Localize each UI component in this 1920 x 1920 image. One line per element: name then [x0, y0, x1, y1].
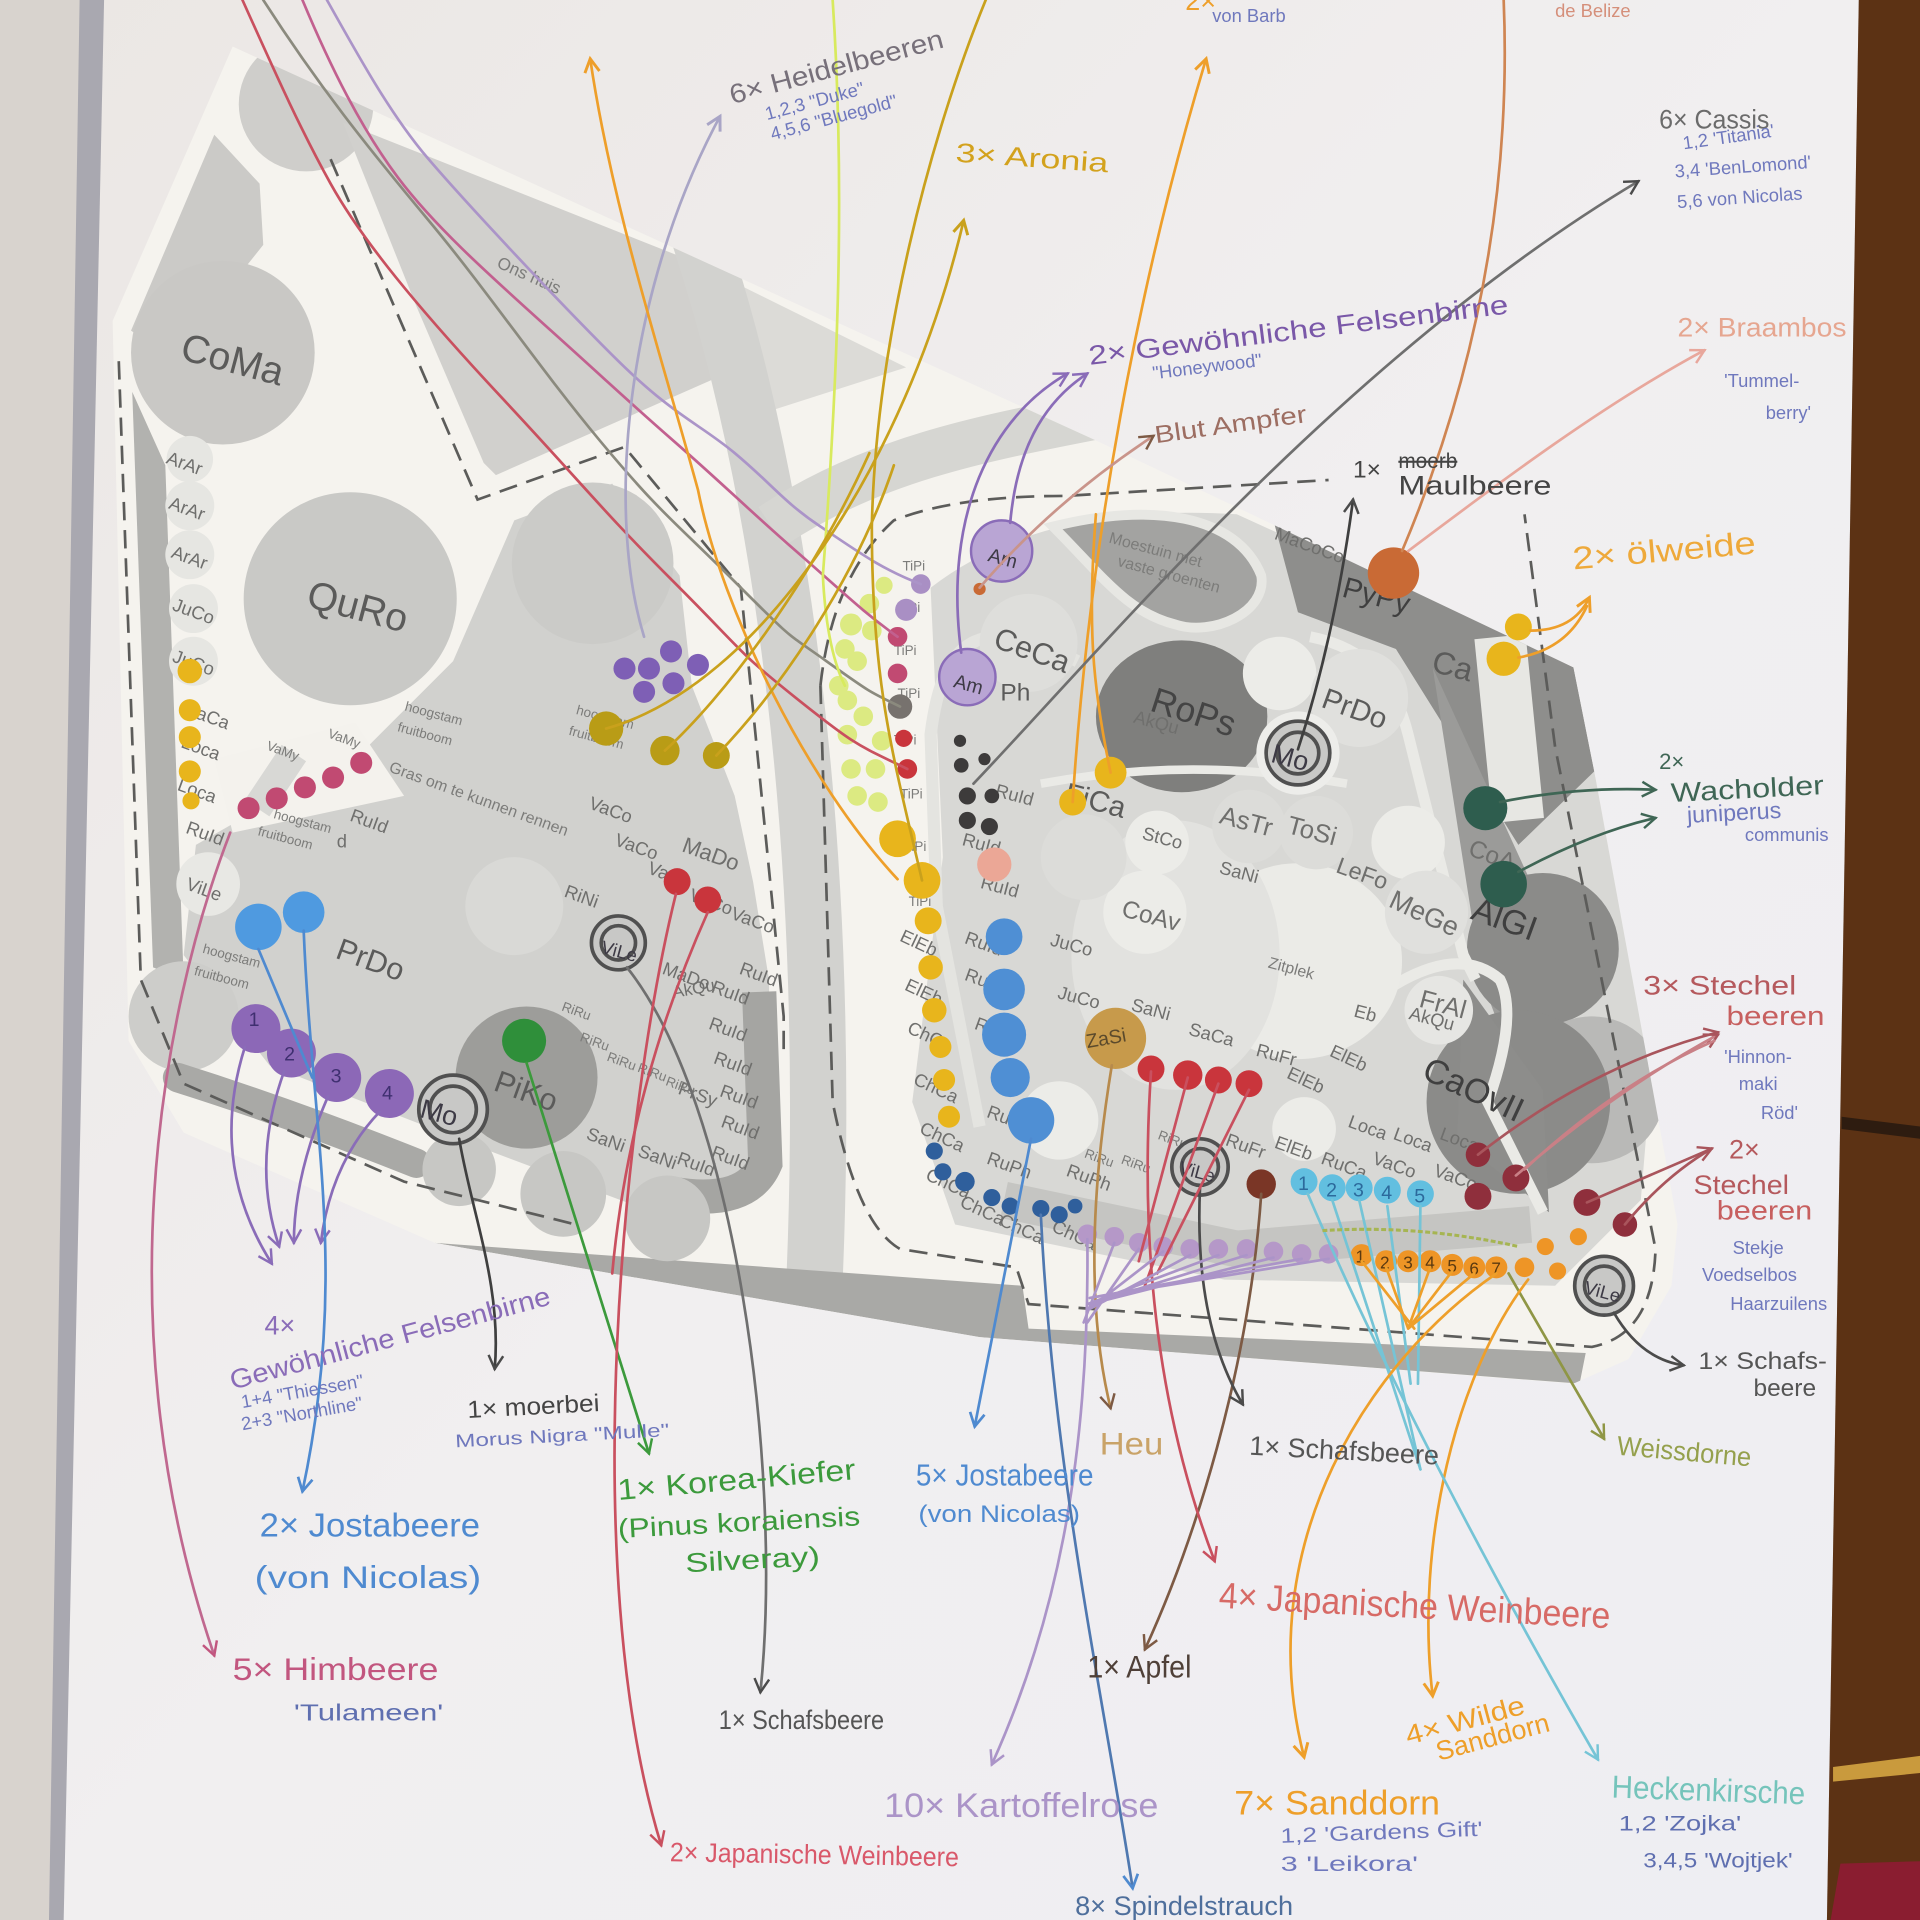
- markers: rose row: [1078, 1224, 1338, 1264]
- label: Stachelbeeren 2x: Stechel: [1693, 1170, 1789, 1200]
- marker labels printed over the dots: [249, 544, 1623, 1306]
- curves: bottom middle: [975, 1065, 1598, 1888]
- label: Heidelbeeren: 1,2,3 "Duke": [763, 77, 866, 124]
- plan labels: RuId: [709, 976, 752, 1009]
- label: Schafsbeere right: 1× Schafs-: [1698, 1348, 1827, 1375]
- plan labels: fruitboom: [256, 824, 314, 853]
- plan labels: QuRo: [303, 573, 413, 641]
- label: Maulbeere: moerb: [1398, 450, 1457, 473]
- plan labels: SaNi: [584, 1123, 629, 1156]
- plan labels: MaDo: [660, 957, 713, 994]
- plan labels: TiPi: [902, 559, 925, 574]
- label: Cassis: 6× Cassis: [1659, 105, 1769, 135]
- label: Jostabeere middle: [916, 1458, 1093, 1528]
- plan labels: RiRu: [1156, 1127, 1189, 1152]
- plan labels: RuId: [979, 871, 1021, 902]
- plan labels: PrDo: [1318, 682, 1392, 736]
- label: top right partial: [1185, 0, 1631, 26]
- plan labels: RuId: [706, 1013, 750, 1046]
- plan labels: SaNi: [635, 1140, 680, 1173]
- label: Heckenkirsche: 3,4,5 'Wojtjek': [1643, 1849, 1793, 1872]
- plan labels: PrSy: [676, 1077, 721, 1111]
- label: Braambos: [1678, 313, 1847, 423]
- plan labels: fruitboom: [193, 963, 251, 992]
- plan labels: TiPi: [909, 894, 931, 909]
- plan labels: CeCa: [989, 621, 1076, 680]
- plan labels: RiRu: [664, 1074, 697, 1098]
- markers: purple Felsenbirne: [231, 1004, 414, 1118]
- label: Blut Ampfer: Blut Ampfer: [1153, 401, 1308, 449]
- markers: navy Spindelstrauch: [926, 1142, 1082, 1223]
- plan labels: AkQu: [1407, 1002, 1457, 1035]
- markers: gold Aronia: [589, 711, 730, 769]
- plan labels: VaCo: [1431, 1160, 1480, 1195]
- label: Braambos: 'Tummel-: [1724, 370, 1799, 391]
- label: Schafsbeere right: [1698, 1348, 1827, 1402]
- markers: Heckenkirsche teal: [1291, 1168, 1434, 1207]
- marker labels printed over the dots: Mo: [1268, 738, 1312, 777]
- label: Felsenbirne bottom: 4×: [264, 1311, 295, 1341]
- plan labels: TiPi: [894, 732, 917, 747]
- label: Wacholder: Wacholder: [1670, 770, 1825, 808]
- markers: Wacholder: [1463, 786, 1527, 907]
- plan labels: RuFr: [1254, 1039, 1299, 1070]
- plan labels: RiRu: [636, 1060, 669, 1084]
- dashed boundary lines: [119, 159, 1656, 1347]
- plan labels: FiCa: [1061, 777, 1130, 825]
- label: Stachelbeeren 2x: 2×: [1729, 1134, 1760, 1164]
- label: Jostabeere left: (von Nicolas): [255, 1559, 481, 1595]
- label: Stachelbeeren 3x: beeren: [1727, 1001, 1824, 1031]
- plan labels: RuPh: [984, 1101, 1035, 1136]
- plan labels: ViLe: [184, 873, 225, 905]
- marker labels printed over the dots: 1: [1356, 1246, 1365, 1266]
- plan labels: ChCa: [911, 1068, 963, 1107]
- label: Kartoffelrose: 10× Kartoffelrose: [884, 1787, 1158, 1825]
- markers: raspberry row: [238, 627, 907, 819]
- marker labels printed over the dots: 1: [1298, 1173, 1309, 1195]
- marker labels printed over the dots: 4: [1381, 1182, 1392, 1204]
- label: Wilde Sanddorn: 4× Wilde: [1402, 1690, 1528, 1751]
- plan labels: SaCa: [1187, 1018, 1237, 1051]
- plan labels: RiRu: [560, 999, 593, 1023]
- label: Wilde Sanddorn: [1402, 1690, 1553, 1767]
- label: Jostabeere left: 2× Jostabeere: [260, 1508, 480, 1545]
- markers: red: [664, 730, 1262, 1097]
- label: Wacholder: communis: [1745, 824, 1829, 845]
- label: Jostabeere middle: 5× Jostabeere: [916, 1458, 1093, 1492]
- label: Schafsbeere bottom: 1× Schafsbeere: [719, 1705, 884, 1735]
- label: Himbeere: 'Tulameen': [294, 1699, 443, 1725]
- label: Moerbei: Morus Nigra "Mulle": [455, 1419, 670, 1451]
- plan labels: SaNi: [1217, 857, 1261, 887]
- plan labels: Loca: [1391, 1123, 1436, 1156]
- plan labels: RuFr: [1223, 1129, 1269, 1163]
- label: Schafsbeere right: beere: [1753, 1375, 1816, 1402]
- label: Stachelbeeren 2x: Voedselbos: [1702, 1264, 1797, 1285]
- label: Korea-Kiefer: Silveray): [684, 1541, 821, 1578]
- plan: house and roads: [239, 37, 1586, 1384]
- label: Stachelbeeren 3x: Röd': [1761, 1102, 1798, 1123]
- plan labels: ElEb: [902, 974, 946, 1009]
- plan labels: VaCo: [728, 902, 777, 937]
- plan labels: TiPi: [898, 600, 920, 615]
- label: Moerbei: [455, 1390, 670, 1451]
- markers: purple and grey TiPi: [888, 574, 931, 719]
- plan labels: ChCa: [1049, 1215, 1101, 1254]
- label: Heidelbeeren: 4,5,6 "Bluegold": [768, 90, 899, 144]
- plan labels: MaCoCo: [1272, 523, 1347, 567]
- label: Felsenbirne bottom: 1+4 "Thiessen": [239, 1370, 365, 1412]
- plan labels: ElEb: [897, 925, 941, 960]
- plan labels: RiRu: [1083, 1146, 1116, 1170]
- plan labels: fruitboom: [396, 719, 454, 748]
- marker labels printed over the dots: ViLe: [599, 936, 640, 966]
- plan labels: TiPi: [900, 786, 923, 801]
- label: Moerbei: 1× moerbei: [467, 1390, 600, 1424]
- marker labels printed over the dots: 4: [382, 1083, 393, 1105]
- plan labels: VaCo: [687, 884, 736, 919]
- label: Jostabeere middle: (von Nicolas): [918, 1501, 1080, 1528]
- label: Braambos: berry': [1766, 402, 1811, 423]
- plan labels: TiPi: [904, 839, 926, 854]
- marker labels printed over the dots: ViLe: [1582, 1277, 1623, 1306]
- plan labels: JuCo: [170, 645, 218, 680]
- plan labels: ChCa: [923, 1164, 975, 1203]
- label: Japanische Weinbeere centre: 4× Japanische Weinbeere: [1218, 1575, 1611, 1636]
- label: Sanddorn: 3 'Leikora': [1281, 1853, 1418, 1876]
- label: Heu: Heu: [1100, 1426, 1163, 1462]
- label: Sanddorn: 7× Sanddorn: [1234, 1785, 1440, 1823]
- markers: dark Mo and ViLe spirals: [419, 721, 1633, 1315]
- plan labels: PiKo: [490, 1064, 562, 1118]
- label: Felsenbirne top: [1087, 290, 1512, 391]
- markers: Zasi, Apfel, Maulbeere: [973, 547, 1419, 1199]
- marker labels printed over the dots: 6: [1469, 1259, 1479, 1279]
- label: Felsenbirne top: "Honeywood": [1151, 349, 1263, 383]
- coloured plant markers: [178, 520, 1637, 1315]
- marker labels printed over the dots: 3: [331, 1065, 342, 1087]
- plan labels: CoA: [1465, 835, 1519, 877]
- plan labels: ElEb: [1284, 1062, 1328, 1098]
- plan labels: RuId: [960, 828, 1003, 859]
- curves: top lines running off page: [242, 0, 921, 769]
- plan labels: TiPi: [898, 686, 920, 701]
- marker labels printed over the dots: 5: [1414, 1185, 1425, 1207]
- plan labels: JuCo: [1056, 982, 1103, 1013]
- curves: bottom left: [152, 833, 766, 1845]
- marker labels printed over the dots: ZaSi: [1084, 1024, 1128, 1053]
- markers: Stachelbeeren: [1464, 1142, 1637, 1237]
- plan labels: RuCa: [1319, 1147, 1371, 1183]
- plan labels: JuCo: [1048, 929, 1095, 960]
- label: Felsenbirne bottom: 2+3 "Northline": [239, 1392, 364, 1434]
- markers: blue Josta: [235, 891, 1054, 1144]
- label: Maulbeere: Maulbeere: [1398, 471, 1551, 501]
- plan labels: AkQu: [1132, 706, 1181, 738]
- marker labels printed over the dots: ViLe: [1177, 1157, 1218, 1186]
- marker labels printed over the dots: 3: [1403, 1253, 1413, 1273]
- label: Wacholder: 2×: [1659, 749, 1684, 774]
- label: top right partial: de Belize: [1555, 0, 1631, 21]
- marker labels printed over the dots: 4: [1425, 1253, 1435, 1273]
- plan labels: Loca: [1346, 1111, 1391, 1144]
- plan labels: AlGI: [1467, 890, 1542, 949]
- plan labels: ChCa: [904, 1017, 957, 1056]
- label: Weissdorne: Weissdorne: [1616, 1431, 1753, 1472]
- label: Aronia: 3× Aronia: [955, 138, 1109, 178]
- plan labels: RuId: [737, 957, 781, 990]
- label: Cassis: 5,6 von Nicolas: [1676, 182, 1803, 212]
- markers: black Cassis: [954, 735, 999, 835]
- plan labels: VaCo: [586, 792, 635, 827]
- markers: Am circles: [939, 520, 1032, 705]
- label: Stachelbeeren 2x: Haarzuilens: [1730, 1293, 1827, 1314]
- plan labels: RuId: [348, 804, 391, 837]
- plan labels: AkQu: [671, 975, 716, 1002]
- plan labels: Zitplek: [1266, 955, 1316, 983]
- label: Korea-Kiefer: 1× Korea-Kiefer: [616, 1453, 857, 1507]
- label: Korea-Kiefer: [616, 1453, 861, 1578]
- plan labels: MaDo: [679, 832, 743, 876]
- plan labels: ArAr: [164, 447, 206, 479]
- plan labels: hoogstam: [272, 806, 333, 836]
- label: Maulbeere: [1353, 450, 1551, 501]
- plan labels: SaCa: [182, 698, 233, 734]
- marker labels printed over the dots: 7: [1491, 1259, 1501, 1279]
- plan labels: ArAr: [166, 492, 208, 524]
- label: Cassis: [1659, 105, 1812, 212]
- marker labels printed over the dots: 1: [249, 1009, 259, 1031]
- label: Heckenkirsche: [1611, 1769, 1806, 1872]
- plan labels: RuId: [719, 1111, 762, 1144]
- plan labels: ChCa: [957, 1191, 1009, 1230]
- plan labels: [164, 252, 1542, 1254]
- plan labels: ChCa: [996, 1209, 1048, 1248]
- plan labels: Ca: [1428, 643, 1477, 688]
- plan labels: RuId: [709, 1141, 752, 1174]
- label: Stachelbeeren 3x: 'Hinnon-: [1724, 1046, 1792, 1067]
- plan labels: Eb: [1352, 1000, 1379, 1026]
- label: Himbeere: 5× Himbeere: [233, 1651, 438, 1687]
- plan labels: RuId: [993, 779, 1036, 810]
- label: Wilde Sanddorn: Sanddorn: [1433, 1708, 1553, 1767]
- label: Apfel: 1× Apfel: [1087, 1649, 1191, 1685]
- label: Himbeere: [233, 1651, 443, 1725]
- label: Cassis: 3,4 'BenLomond': [1674, 151, 1812, 182]
- marker labels printed over the dots: 5: [1447, 1256, 1457, 1276]
- label: Stachelbeeren 2x: beeren: [1717, 1196, 1812, 1226]
- marker labels printed over the dots: Mo: [417, 1094, 461, 1132]
- plan labels: vaste groenten: [1116, 553, 1222, 597]
- plan labels: hoogstam: [575, 702, 636, 732]
- label: Wacholder: [1659, 749, 1829, 845]
- curves: right side: [1428, 789, 1718, 1696]
- label: Felsenbirne bottom: Gewöhnliche Felsenbirne: [226, 1281, 554, 1396]
- plan labels: d: [337, 830, 347, 851]
- plan labels: hoogstam: [201, 941, 262, 971]
- label: Sanddorn: [1234, 1785, 1483, 1876]
- plan labels: Loca: [175, 774, 220, 807]
- plan labels: RiRu: [605, 1049, 638, 1073]
- label: Stachelbeeren 2x: [1693, 1134, 1827, 1314]
- label: Sanddorn: 1,2 'Gardens Gift': [1280, 1818, 1483, 1848]
- markers: yellow Ölweide and Loca: [178, 613, 1532, 1128]
- label: Heidelbeeren: [726, 24, 958, 152]
- plan labels: ArAr: [169, 541, 211, 573]
- plan: left garden: [129, 135, 771, 1261]
- plan labels: RoPs: [1146, 680, 1241, 745]
- label: Heckenkirsche: Heckenkirsche: [1611, 1769, 1806, 1811]
- label: Ölweide: 2× ölweide: [1571, 524, 1757, 576]
- plan labels: VaCo: [645, 857, 694, 892]
- label: Stachelbeeren 3x: maki: [1739, 1073, 1778, 1094]
- label: Maulbeere: 1×: [1353, 457, 1381, 484]
- plan labels: VaMy: [265, 738, 301, 764]
- plan labels: CaOvII: [1417, 1050, 1530, 1130]
- marker labels printed over the dots: Am: [951, 671, 985, 699]
- plan labels: Gras om te kunnen rennen: [387, 759, 570, 840]
- plan labels: RuId: [184, 817, 227, 850]
- markers: lime Heckenkirsche area: [829, 577, 893, 812]
- plan labels: RuId: [711, 1047, 755, 1080]
- plan labels: CoMa: [176, 326, 289, 395]
- label: Felsenbirne top: 2× Gewöhnliche Felsenbirne: [1087, 290, 1510, 371]
- marker labels printed over the dots: 3: [1353, 1179, 1364, 1201]
- label: top right partial: von Barb: [1212, 5, 1286, 26]
- plan labels: VaCo: [612, 829, 661, 864]
- label: Heidelbeeren: 6× Heidelbeeren: [726, 24, 947, 110]
- label: Stachelbeeren 3x: [1643, 970, 1824, 1123]
- label: Japanische Weinbeere bottom: 2× Japanische Weinbeere: [670, 1837, 959, 1872]
- plan labels: FrAl: [1416, 985, 1469, 1025]
- plan labels: RuId: [962, 964, 1006, 997]
- plan labels: fruitboom: [567, 723, 625, 752]
- plan labels: ToSi: [1284, 811, 1340, 851]
- plan labels: RuPh: [1064, 1160, 1114, 1195]
- plan labels: Ons huis: [494, 252, 564, 298]
- plan labels: TiPi: [894, 643, 917, 658]
- label: Braambos: 2× Braambos: [1678, 313, 1847, 343]
- label: Heckenkirsche: 1,2 'Zojka': [1619, 1813, 1741, 1836]
- plan labels: RiRu: [578, 1030, 611, 1054]
- plan labels: SaNi: [1129, 994, 1173, 1024]
- plan labels: CoAv: [1119, 896, 1184, 937]
- plan labels: ElEb: [1272, 1131, 1316, 1164]
- plan labels: Loca: [179, 731, 224, 765]
- marker labels printed over the dots: 2: [1380, 1253, 1390, 1273]
- plan labels: JuCo: [170, 594, 218, 628]
- label: Felsenbirne bottom: [226, 1281, 554, 1434]
- plan labels: MeGe: [1385, 884, 1464, 943]
- plan labels: ElEb: [1327, 1040, 1371, 1076]
- plan labels: RuId: [717, 1080, 761, 1113]
- plan labels: ChCa: [917, 1117, 969, 1156]
- plan labels: PrDo: [332, 932, 409, 988]
- marker labels printed over the dots: 2: [284, 1043, 295, 1065]
- markers: Korean pine: [502, 1019, 546, 1063]
- site plan sheet: [113, 37, 1678, 1384]
- plan labels: Moestuin met: [1107, 530, 1204, 571]
- label: Stachelbeeren 3x: 3× Stechel: [1643, 970, 1796, 1000]
- label: Korea-Kiefer: (Pinus koraiensis: [617, 1501, 861, 1544]
- plan labels: PyPy: [1339, 571, 1414, 621]
- label: Wacholder: juniperus: [1685, 797, 1782, 828]
- label: Stachelbeeren 2x: Stekje: [1733, 1237, 1784, 1258]
- plan labels: RiNi: [562, 880, 602, 912]
- markers: purple Heidelbeeren group: [613, 640, 709, 703]
- label: Cassis: 1,2 'Titania': [1681, 120, 1775, 153]
- plan labels: RuId: [675, 1147, 718, 1180]
- plan labels: StCo: [1140, 822, 1185, 853]
- label: Schafsbeere centre: 1× Schafsbeere: [1249, 1431, 1440, 1471]
- plan labels: VaCo: [1370, 1147, 1419, 1182]
- plan: right garden: [912, 513, 1665, 1286]
- label: Jostabeere left: [255, 1508, 481, 1595]
- marker labels printed over the dots: 2: [1326, 1179, 1337, 1201]
- plan labels: Ph: [1000, 679, 1030, 706]
- markers: Sanddorn row: [1351, 1228, 1587, 1280]
- plan labels: RuId: [962, 927, 1006, 960]
- marker labels printed over the dots: Am: [986, 544, 1020, 573]
- plan labels: hoogstam: [403, 699, 464, 728]
- curves: Heidelbeeren, Aronia, orange: [590, 0, 1206, 880]
- plan labels: AsTr: [1217, 802, 1276, 843]
- curves: centre top arrows: [957, 0, 1704, 784]
- plan labels: RiRu: [1119, 1152, 1153, 1176]
- plan labels: LeFo: [1333, 852, 1392, 895]
- plan labels: Loca: [1437, 1123, 1483, 1156]
- plan labels: VaMy: [326, 726, 363, 751]
- plan labels: RuPh: [984, 1147, 1035, 1183]
- plan labels: RuId: [972, 1013, 1016, 1046]
